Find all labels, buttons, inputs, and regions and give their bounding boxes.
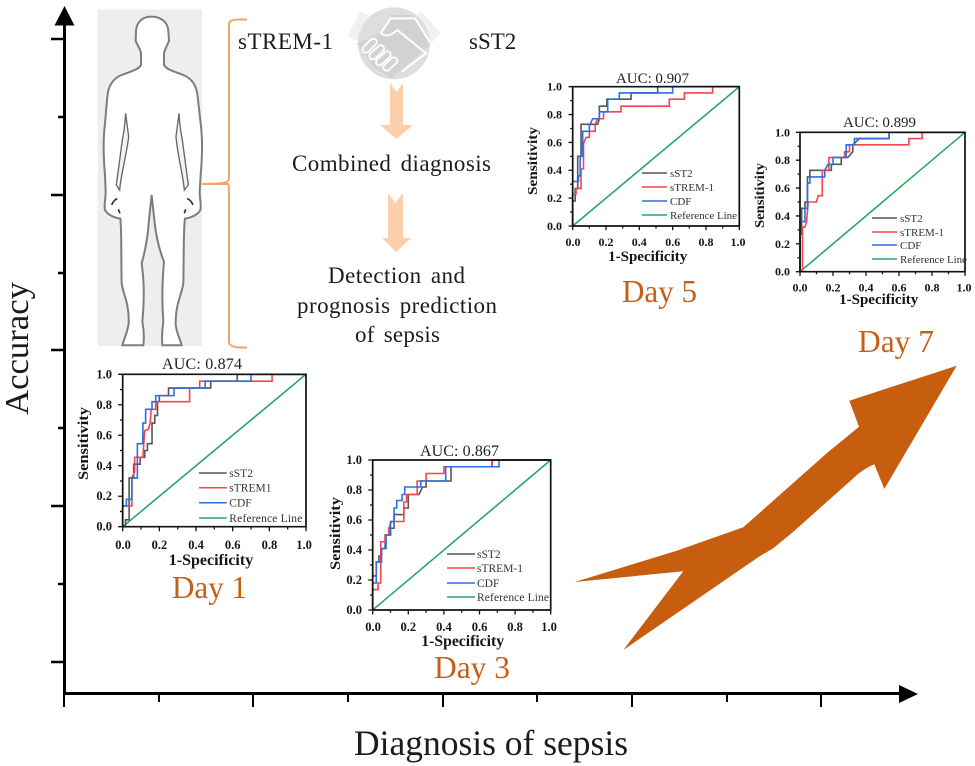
day 7 plot curves (796, 132, 965, 276)
day 5 tick labels: 0.4 (547, 163, 562, 177)
day 5 axis titles: 1-Specificity (608, 249, 688, 265)
chart: day 1 ROC (76, 356, 312, 569)
day 3 plot curves (368, 460, 551, 614)
day 3 tick labels: 0.0 (365, 620, 381, 634)
day 5 tick labels: 1.0 (547, 80, 562, 94)
day 1 tick labels: 0.8 (96, 398, 112, 412)
day 1 plot curves (118, 374, 306, 531)
day 7 legend: sST2 (900, 213, 923, 225)
day 7 tick labels: 0.2 (775, 237, 790, 251)
day 5 tick labels: 0.6 (665, 235, 680, 249)
day 5 tick labels: 0.2 (547, 191, 562, 205)
label: sTREM-1: sTREM-1 (238, 29, 333, 54)
day 1 axis titles: Sensitivity (76, 406, 92, 480)
day 7 tick labels: 0.4 (775, 209, 790, 223)
day 5 legend: sTREM-1 (670, 182, 714, 194)
day 1 axis titles (76, 406, 253, 569)
day 7 legend: CDF (900, 240, 921, 252)
day 5 tick labels: 0.2 (598, 235, 614, 249)
day 3 tick labels: 0.2 (400, 620, 416, 634)
y axis title: Accuracy (0, 282, 36, 415)
day 5 tick labels: 0.0 (547, 219, 562, 233)
day 1 tick labels: 0.6 (96, 428, 112, 442)
text: detection and prognosis prediction of sepsis: of sepsis (355, 322, 440, 347)
day 3 tick labels: 0.6 (472, 620, 487, 634)
day 3 tick labels: 1.0 (541, 620, 557, 634)
day 5 axis titles (526, 127, 688, 265)
day 1 tick labels: 0.6 (225, 538, 241, 552)
icon: handshake (348, 7, 441, 79)
panel: human body (98, 10, 202, 346)
day 3 tick labels: 0.4 (346, 543, 363, 557)
day 3 tick labels: 0.4 (436, 620, 452, 634)
day 7 tick labels: 0.0 (792, 281, 808, 295)
day 1 label: Day 1 (172, 569, 247, 605)
day 3 tick labels: 0.6 (346, 513, 362, 527)
day 1 legend: Reference Line (229, 513, 302, 525)
day 7 tick labels: 0.8 (924, 281, 940, 295)
chart: day 5 ROC (526, 71, 746, 265)
day 3 axis titles (328, 496, 504, 650)
day 7 tick labels: 1.0 (956, 281, 972, 295)
day 7 tick labels: 0.6 (775, 181, 790, 195)
day 1 tick labels: 0.4 (96, 459, 113, 473)
big rising arrow (575, 366, 957, 650)
day 3 tick labels: 0.0 (346, 603, 362, 617)
day 1 tick labels: 0.4 (188, 538, 205, 552)
day 3 tick labels: 0.8 (507, 620, 523, 634)
day 7 tick labels: 0.8 (775, 153, 790, 167)
arrow: to combined diagnosis (380, 83, 413, 139)
day 5 legend: Reference Line (670, 210, 737, 222)
day 5 legend: sST2 (670, 168, 693, 180)
x axis: diagnosis (63, 685, 918, 707)
bracket (202, 20, 247, 348)
day 1 legend (199, 468, 302, 525)
day 7 tick labels: 0.0 (775, 265, 790, 279)
day 1 tick labels: 1.0 (96, 367, 112, 381)
day 7 legend (872, 213, 967, 266)
day 3 tick labels: 1.0 (346, 453, 362, 467)
day 5 tick labels: 0.4 (632, 235, 647, 249)
x axis title: Diagnosis of sepsis (354, 723, 628, 763)
day 5 tick labels: 0.8 (698, 235, 714, 249)
day 5 legend: CDF (670, 196, 691, 208)
day 1 tick labels: 0.2 (152, 538, 167, 552)
day 7 legend: sTREM-1 (900, 227, 944, 239)
day 7 auc title: AUC: 0.899 (843, 115, 916, 131)
day 1 tick labels (96, 367, 312, 552)
day 3 auc title: AUC: 0.867 (420, 443, 499, 460)
day 7 tick labels (775, 125, 972, 295)
day 7 axis titles: 1-Specificity (839, 292, 919, 308)
day 1 legend: sST2 (229, 468, 253, 480)
day 1 tick labels: 0.0 (115, 538, 131, 552)
day 7 axis titles (753, 163, 919, 308)
text: combined diagnosis: Combined diagnosis (292, 151, 491, 176)
text: detection and prognosis prediction of sepsis: Detection and (328, 263, 466, 288)
day 5 tick labels (547, 80, 746, 249)
day 5 axis titles: Sensitivity (526, 127, 541, 195)
day 5 label: Day 5 (622, 273, 697, 309)
day 7 tick labels: 0.4 (858, 281, 874, 295)
y axis: accuracy (51, 6, 74, 694)
day 5 tick labels: 0.6 (547, 135, 562, 149)
day 5 plot curves (569, 87, 739, 230)
day 1 legend: sTREM1 (229, 483, 272, 495)
text: detection and prognosis prediction of sepsis (297, 263, 498, 347)
day 5 tick labels: 1.0 (730, 235, 746, 249)
label: sST2: sST2 (469, 29, 516, 54)
day 3 tick labels (346, 453, 557, 634)
day 5 tick labels: 0.0 (566, 235, 580, 249)
day 7 legend: Reference Line (900, 254, 967, 266)
arrow: to detection and prognosis (382, 193, 411, 252)
day 7 tick labels: 1.0 (775, 125, 790, 139)
chart: day 7 ROC (753, 115, 972, 308)
day 1 tick labels: 0.8 (262, 538, 277, 552)
text: detection and prognosis prediction of sepsis: prognosis prediction (297, 293, 498, 318)
chart: day 3 ROC (328, 443, 557, 650)
day 5 tick labels: 0.8 (547, 108, 562, 122)
day 1 tick labels: 1.0 (296, 538, 312, 552)
day 3 tick labels: 0.2 (346, 573, 362, 587)
day 1 axis titles: 1-Specificity (169, 552, 253, 569)
day 3 legend: sTREM-1 (477, 563, 523, 575)
day 3 legend: CDF (477, 578, 499, 590)
day 7 axis titles: Sensitivity (753, 163, 768, 228)
day 1 tick labels: 0.0 (96, 520, 112, 534)
day 1 legend: CDF (229, 498, 252, 510)
day 7 tick labels: 0.6 (892, 281, 906, 295)
day 3 tick labels: 0.8 (346, 483, 362, 497)
day 3 label: Day 3 (434, 649, 510, 685)
day 3 legend (447, 549, 549, 604)
day 1 tick labels: 0.2 (96, 489, 112, 503)
day 7 label: Day 7 (858, 323, 934, 359)
day 3 legend: Reference Line (477, 592, 549, 604)
day 3 legend: sST2 (477, 549, 501, 561)
day 5 auc title: AUC: 0.907 (616, 71, 690, 87)
day 5 legend (642, 168, 737, 222)
day 7 tick labels: 0.2 (826, 281, 840, 295)
day 3 axis titles: 1-Specificity (421, 633, 504, 650)
day 1 auc title: AUC: 0.874 (162, 356, 242, 373)
day 3 axis titles: Sensitivity (328, 496, 344, 570)
